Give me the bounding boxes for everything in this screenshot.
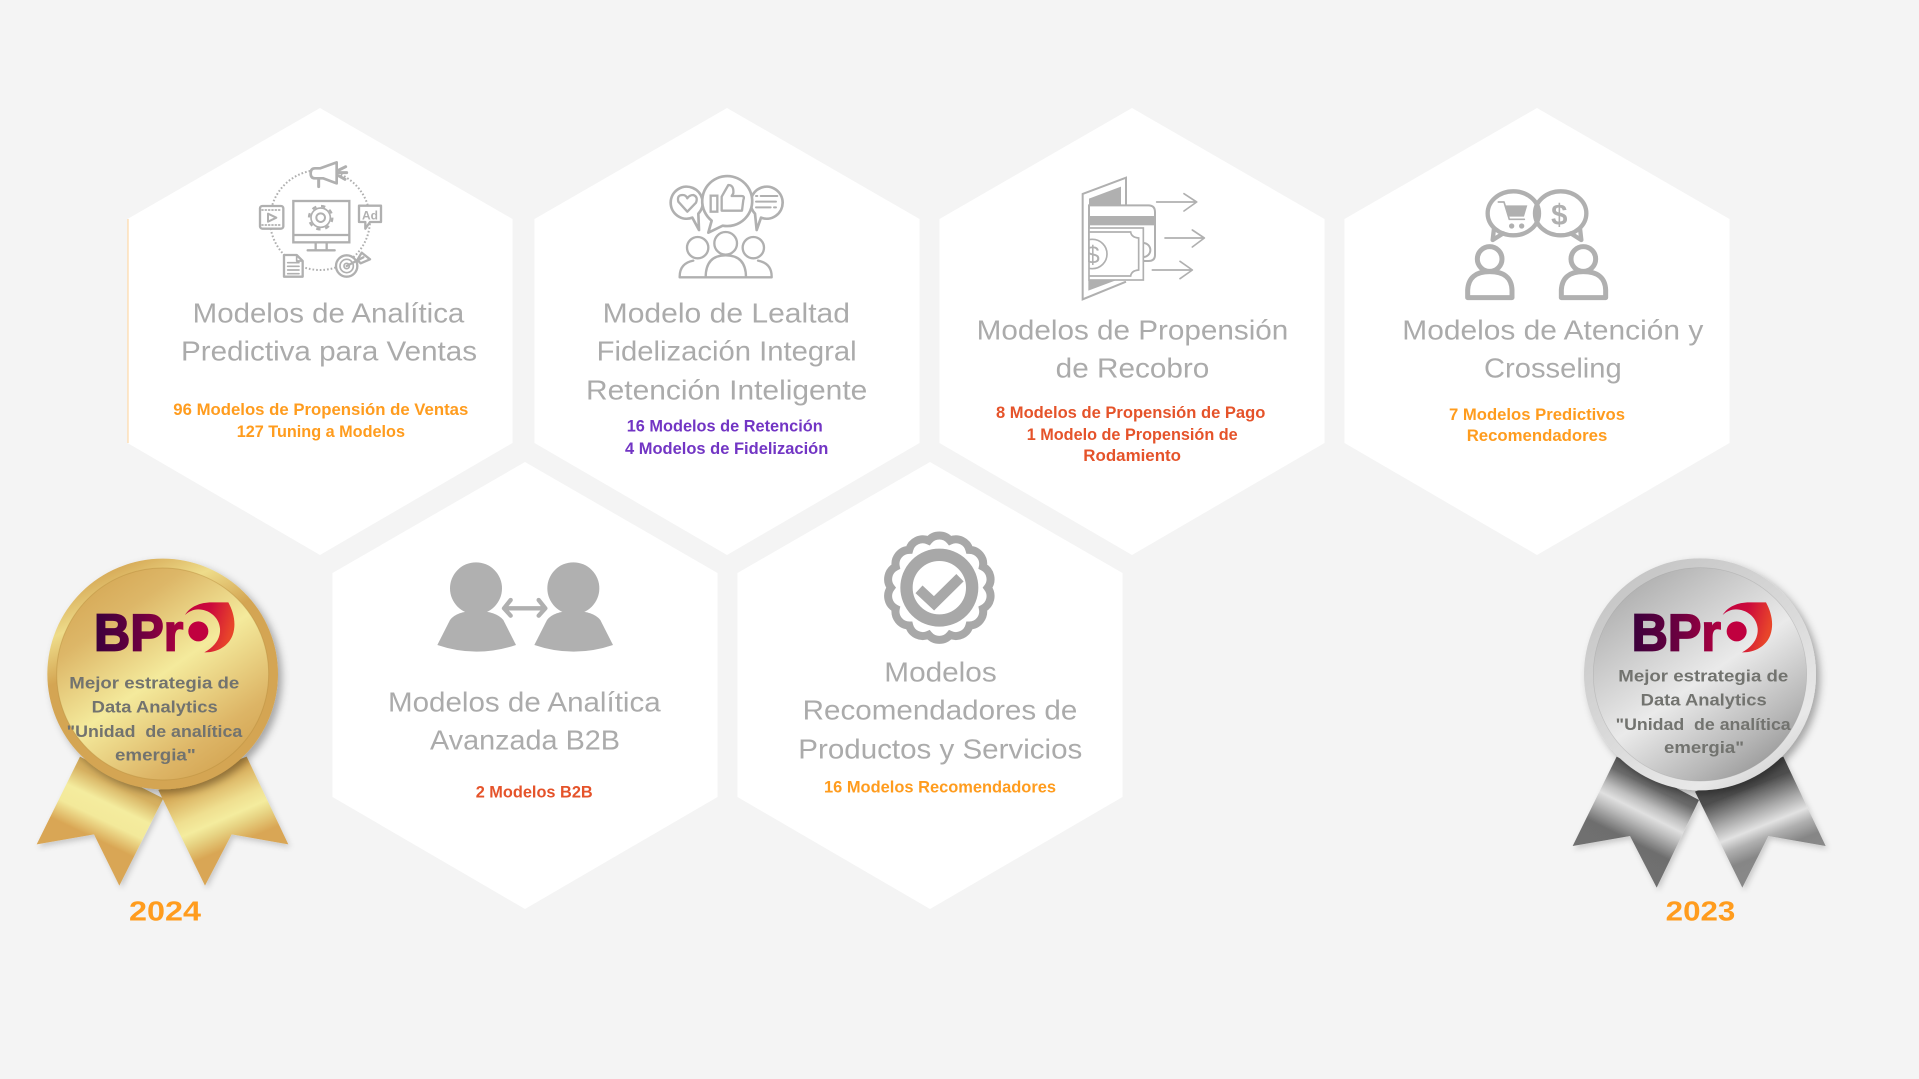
heading [388,687,661,755]
heading: Retención Inteligente [586,374,867,405]
award text [1616,667,1791,757]
hexagon background [738,462,1122,909]
badge: silver medal 2023 [1573,558,1826,926]
award text [67,673,243,765]
heading: Fidelización Integral [597,336,857,367]
badge: gold medal 2024 [37,559,288,926]
panel: Modelo de Lealtad [534,108,920,555]
hexagon background [332,462,718,909]
model counts: 96 Modelos de Propensión de Ventas [173,400,468,419]
orange edge line [127,219,129,443]
model counts: 16 Modelos de Retención [627,417,823,436]
award text: "Unidad de analítica [67,722,243,741]
icon: two people with cart and dollar bubbles: $ [1551,199,1567,232]
medal graphic [37,559,288,886]
hexagon background [940,108,1324,555]
icon: two people exchanging [437,562,613,652]
year: 2024 [129,896,201,926]
model counts: 16 Modelos Recomendadores [824,778,1056,797]
heading [1402,314,1703,384]
panel: Modelos de Atención y Crosseling [1344,108,1730,555]
panel: Modelos de Analítica Avanzada B2B [332,462,718,909]
panel: Modelos de Propensión de Recobro [940,108,1324,555]
heading: Modelos [884,657,997,688]
heading [977,314,1288,384]
model counts: 2 Modelos B2B [476,783,593,802]
heading: Modelo de Lealtad [603,298,850,329]
heading: Avanzada B2B [430,724,620,755]
hexagon background [128,108,512,555]
model counts [996,403,1265,465]
heading [181,298,477,367]
icon: two people with cart and dollar bubbles [1468,191,1606,298]
award text: Mejor estrategia de [1618,667,1788,686]
model counts: 4 Modelos de Fidelización [625,439,828,458]
heading: Predictiva para Ventas [181,336,477,367]
model counts [1449,405,1625,445]
panel: Modelos de Analítica Predictiva para Ventas [128,108,512,555]
award text: emergia" [115,746,196,765]
icon: wallet with card, bill and arrows: $ [1086,241,1100,269]
model counts: 127 Tuning a Modelos [237,422,405,441]
icon: wallet with card, bill and arrows [1078,178,1204,299]
heading: Modelos de Atención y [1402,314,1703,346]
icon: loyalty speech bubbles and people [671,176,783,277]
model counts: Rodamiento [1083,446,1181,465]
model counts: 8 Modelos de Propensión de Pago [996,403,1265,422]
heading: Crosseling [1484,353,1622,384]
model counts [625,417,828,458]
heading: Productos y Servicios [798,733,1082,764]
icon: digital marketing circle: Ad [362,208,378,222]
panel: Modelos Recomendadores [738,462,1122,909]
heading: Recomendadores de [803,694,1077,725]
award text: Mejor estrategia de [69,673,239,692]
model counts: 7 Modelos Predictivos [1449,405,1625,424]
medal graphic: BPr [1632,605,1721,663]
award text: Data Analytics [1641,691,1767,710]
heading: Modelos de Analítica [193,298,465,329]
year: 2023 [1666,896,1735,926]
heading [586,298,867,405]
model counts: 1 Modelo de Propensión de [1027,425,1238,444]
heading [798,657,1082,764]
award text: emergia" [1664,738,1744,757]
heading: de Recobro [1056,353,1209,384]
icon: seal with check mark [888,536,991,640]
award text: Data Analytics [92,698,218,717]
medal graphic: BPr [94,605,183,663]
model counts: Recomendadores [1467,426,1607,445]
medal graphic [1573,558,1826,888]
heading: Modelos de Analítica [388,687,661,718]
award text: "Unidad de analítica [1616,715,1791,734]
heading: Modelos de Propensión [977,314,1288,346]
hexagon background [534,108,920,555]
icon: digital marketing circle [260,162,381,277]
hexagon background [1344,108,1730,555]
model counts [173,400,468,441]
